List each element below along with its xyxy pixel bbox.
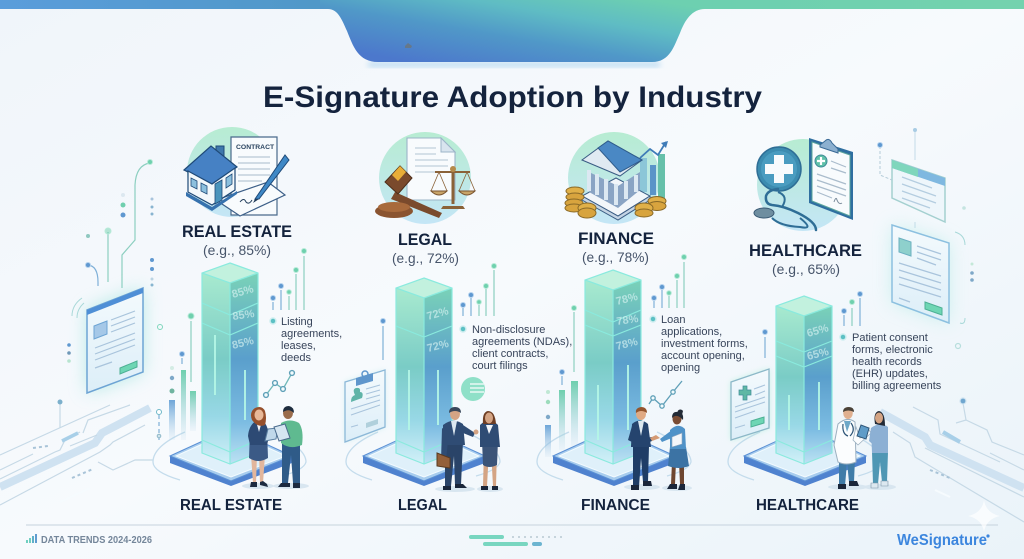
description: agreements, xyxy=(281,328,342,340)
icon: bank, coins and growth xyxy=(565,132,668,224)
description: leases, xyxy=(281,340,316,352)
pillar: 78 percent: 78% xyxy=(616,313,639,328)
heading: finance: FINANCE xyxy=(578,229,654,248)
pillar: 78 percent: 78% xyxy=(615,336,639,353)
logo: WeSignature xyxy=(897,532,987,549)
card: medical record xyxy=(731,369,769,440)
label: legal: LEGAL xyxy=(398,497,447,514)
pillar: 65 percent: 65% xyxy=(806,322,830,340)
people: attorney and colleague xyxy=(435,407,503,492)
footer text: DATA TRENDS 2024-2026 xyxy=(41,535,152,546)
heading: legal: LEGAL xyxy=(398,230,452,249)
value: 85%: (e.g., 85%) xyxy=(203,242,271,258)
sparkline nodes xyxy=(264,371,294,397)
data bars and nodes xyxy=(545,306,578,457)
pillar: 85 percent xyxy=(202,263,258,464)
icon: bar chart xyxy=(26,534,37,543)
pillar: 72 percent: 72% xyxy=(426,305,450,323)
value: 72%: (e.g., 72%) xyxy=(392,250,459,266)
connector lines: right xyxy=(878,128,974,282)
description: client contracts, xyxy=(472,348,548,360)
description: investment forms, xyxy=(661,338,748,350)
window: top right xyxy=(892,160,945,222)
platform xyxy=(346,428,500,486)
description xyxy=(460,324,572,372)
description: deeds xyxy=(281,352,311,364)
panel: legal xyxy=(345,132,572,514)
sparkline xyxy=(649,381,682,408)
description: forms, electronic xyxy=(852,344,933,356)
description xyxy=(650,314,748,374)
value: 65%: (e.g., 65%) xyxy=(772,261,840,277)
platform xyxy=(537,428,691,486)
platform xyxy=(153,428,306,486)
description: account opening, xyxy=(661,350,745,362)
description: (EHR) updates, xyxy=(852,368,928,380)
footer progress dashes xyxy=(469,535,566,546)
description: Loan xyxy=(661,314,685,326)
pillar: 78 percent: 78% xyxy=(615,291,639,308)
description: court filings xyxy=(472,360,528,372)
description: agreements (NDAs), xyxy=(472,336,572,348)
people: agent and client xyxy=(242,406,309,489)
icon: gavel and scales xyxy=(375,132,475,224)
panel: healthcare xyxy=(728,138,942,514)
tech lines: bottom right xyxy=(880,344,1024,522)
signal stems xyxy=(270,248,306,310)
description xyxy=(840,332,942,392)
pillar: 85 percent: 85% xyxy=(231,283,255,301)
footer rule xyxy=(26,524,998,526)
pillar: 65 percent: 65% xyxy=(806,346,830,363)
people: doctor and patient xyxy=(828,407,896,490)
description: Patient consent xyxy=(852,332,928,344)
window: bottom right xyxy=(892,225,965,323)
description xyxy=(270,316,342,364)
people: banker and client xyxy=(624,407,692,491)
right windows xyxy=(878,128,974,323)
description: health records xyxy=(852,356,922,368)
document window: left xyxy=(67,288,143,393)
panel: real estate xyxy=(153,127,342,514)
pillar: 85 percent: 85% xyxy=(231,335,255,352)
signal stems xyxy=(762,292,862,358)
description: billing agreements xyxy=(852,380,942,392)
data bars and nodes xyxy=(156,366,196,440)
pillar: 65 percent xyxy=(776,296,832,464)
pillar: 85 percent: 85% xyxy=(232,308,255,323)
sparkle xyxy=(968,500,1000,532)
icon: medical cross, clipboard and stethoscope xyxy=(754,138,853,231)
signal stems xyxy=(652,254,686,308)
label: finance: FINANCE xyxy=(581,497,650,514)
pillar: 78 percent xyxy=(585,270,641,464)
description: Listing xyxy=(281,316,313,328)
label: real estate: REAL ESTATE xyxy=(180,497,282,514)
sparkline xyxy=(266,373,292,395)
signal stems xyxy=(380,264,496,360)
icon: house and contract: CONTRACT xyxy=(236,144,275,151)
tech lines: bottom left xyxy=(0,400,153,505)
description: opening xyxy=(661,362,700,374)
pillar: 72 percent xyxy=(396,278,452,464)
label: healthcare: HEALTHCARE xyxy=(756,497,859,514)
description: applications, xyxy=(661,326,722,338)
heading: real estate: REAL ESTATE xyxy=(182,222,292,241)
decorative circuit nodes: left xyxy=(86,160,194,382)
icon: house and contract xyxy=(184,127,289,217)
title: E-Signature Adoption by Industry xyxy=(263,81,762,114)
platform xyxy=(728,428,882,486)
footer: data trends xyxy=(26,534,152,546)
description: Non-disclosure xyxy=(472,324,545,336)
pillar: 72 percent: 72% xyxy=(426,338,450,355)
heading: healthcare: HEALTHCARE xyxy=(749,241,862,260)
icon: round list badge xyxy=(461,377,485,401)
value: 78%: (e.g., 78%) xyxy=(582,249,649,265)
top banner xyxy=(0,0,1024,67)
card: profile clipboard xyxy=(345,370,385,442)
panel: finance xyxy=(537,132,748,514)
